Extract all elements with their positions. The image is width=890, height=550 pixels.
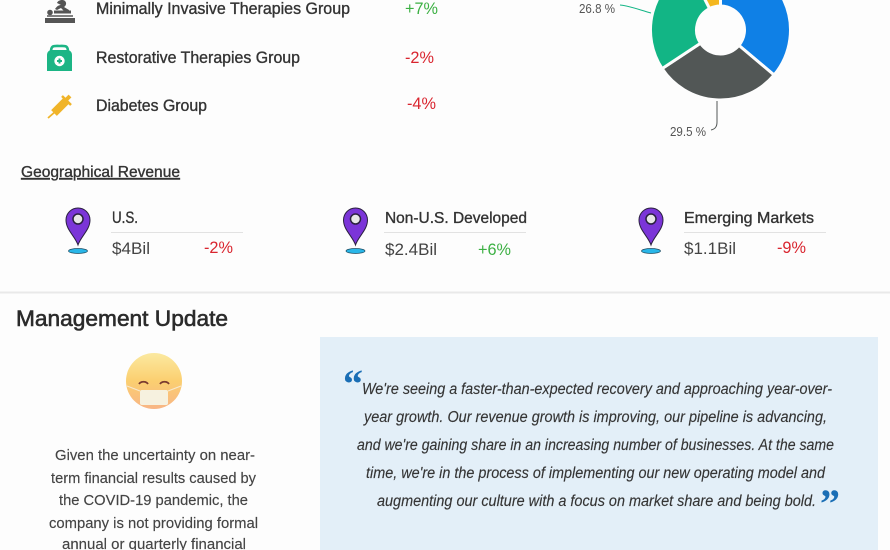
heading: Management Update: Management Update bbox=[16, 306, 228, 331]
slice: blue bbox=[720, 0, 790, 75]
value: -4%: -4% bbox=[407, 94, 436, 113]
slice: yellow bbox=[689, 0, 720, 9]
change: -2%: -2% bbox=[204, 238, 233, 257]
panel: management quote bbox=[320, 337, 878, 550]
quote text: and we're gaining share in an increasing number of businesses. At the same bbox=[357, 437, 834, 454]
slice: gray 29.5% bbox=[662, 43, 774, 100]
icon: map pin bbox=[66, 208, 90, 254]
slice: green 26.8% bbox=[650, 0, 710, 69]
icon: medical bag bbox=[47, 46, 72, 71]
icon: surgery table bbox=[45, 0, 75, 23]
quote text: augmenting our culture with a focus on market share and being bold. bbox=[377, 493, 816, 510]
label: Non-U.S. Developed: Non-U.S. Developed bbox=[385, 210, 527, 227]
quote text bbox=[357, 381, 834, 510]
text block: guidance note: Given the uncertainty on near- bbox=[55, 448, 255, 464]
change: +6%: +6% bbox=[478, 240, 511, 259]
donut chart: revenue share bbox=[650, 0, 790, 100]
value: -2%: -2% bbox=[405, 48, 434, 67]
callout: 26.8 %: 26.8 % bbox=[579, 2, 615, 16]
value: $4Bil: $4Bil bbox=[112, 240, 150, 258]
panel: product group revenue bbox=[45, 0, 438, 118]
quote text: time, we're in the process of implementing our new operating model and bbox=[366, 465, 826, 482]
icon: map pin bbox=[344, 208, 368, 254]
heading: Geographical Revenue: Geographical Revenue bbox=[21, 164, 180, 181]
value: $1.1Bil: $1.1Bil bbox=[684, 240, 736, 258]
text block: guidance note bbox=[49, 448, 258, 550]
text block: guidance note: the COVID-19 pandemic, the bbox=[59, 493, 248, 509]
icon: opening quote mark: “ bbox=[343, 361, 363, 406]
callout: 29.5 %: 29.5 % bbox=[670, 125, 706, 139]
label: Emerging Markets: Emerging Markets bbox=[684, 210, 814, 227]
label: Diabetes Group: Diabetes Group bbox=[96, 97, 207, 115]
callout: 29.5 % bbox=[670, 101, 717, 139]
icon: map pin bbox=[639, 208, 663, 254]
text block: guidance note: term financial results caused by bbox=[51, 471, 257, 487]
value: $2.4Bil: $2.4Bil bbox=[385, 241, 437, 259]
callout: 26.8 % bbox=[579, 2, 651, 16]
quote text: year growth. Our revenue growth is improving, our pipeline is advancing, bbox=[363, 409, 827, 426]
panel: U.S. revenue bbox=[66, 208, 243, 258]
icon: masked face emoji bbox=[126, 353, 182, 409]
label: Minimally Invasive Therapies Group: Minimally Invasive Therapies Group bbox=[96, 0, 350, 18]
change: -9%: -9% bbox=[777, 238, 806, 257]
quote text: We're seeing a faster-than-expected recovery and approaching year-over- bbox=[362, 381, 832, 398]
text block: guidance note: company is not providing formal bbox=[49, 516, 258, 532]
label: Restorative Therapies Group: Restorative Therapies Group bbox=[96, 49, 300, 67]
panel: Emerging Markets revenue bbox=[639, 208, 826, 258]
label: U.S.: U.S. bbox=[112, 209, 138, 227]
panel: Non-U.S. Developed revenue bbox=[344, 208, 527, 259]
icon: closing quote mark: ” bbox=[820, 481, 840, 526]
icon: syringe bbox=[48, 96, 71, 118]
